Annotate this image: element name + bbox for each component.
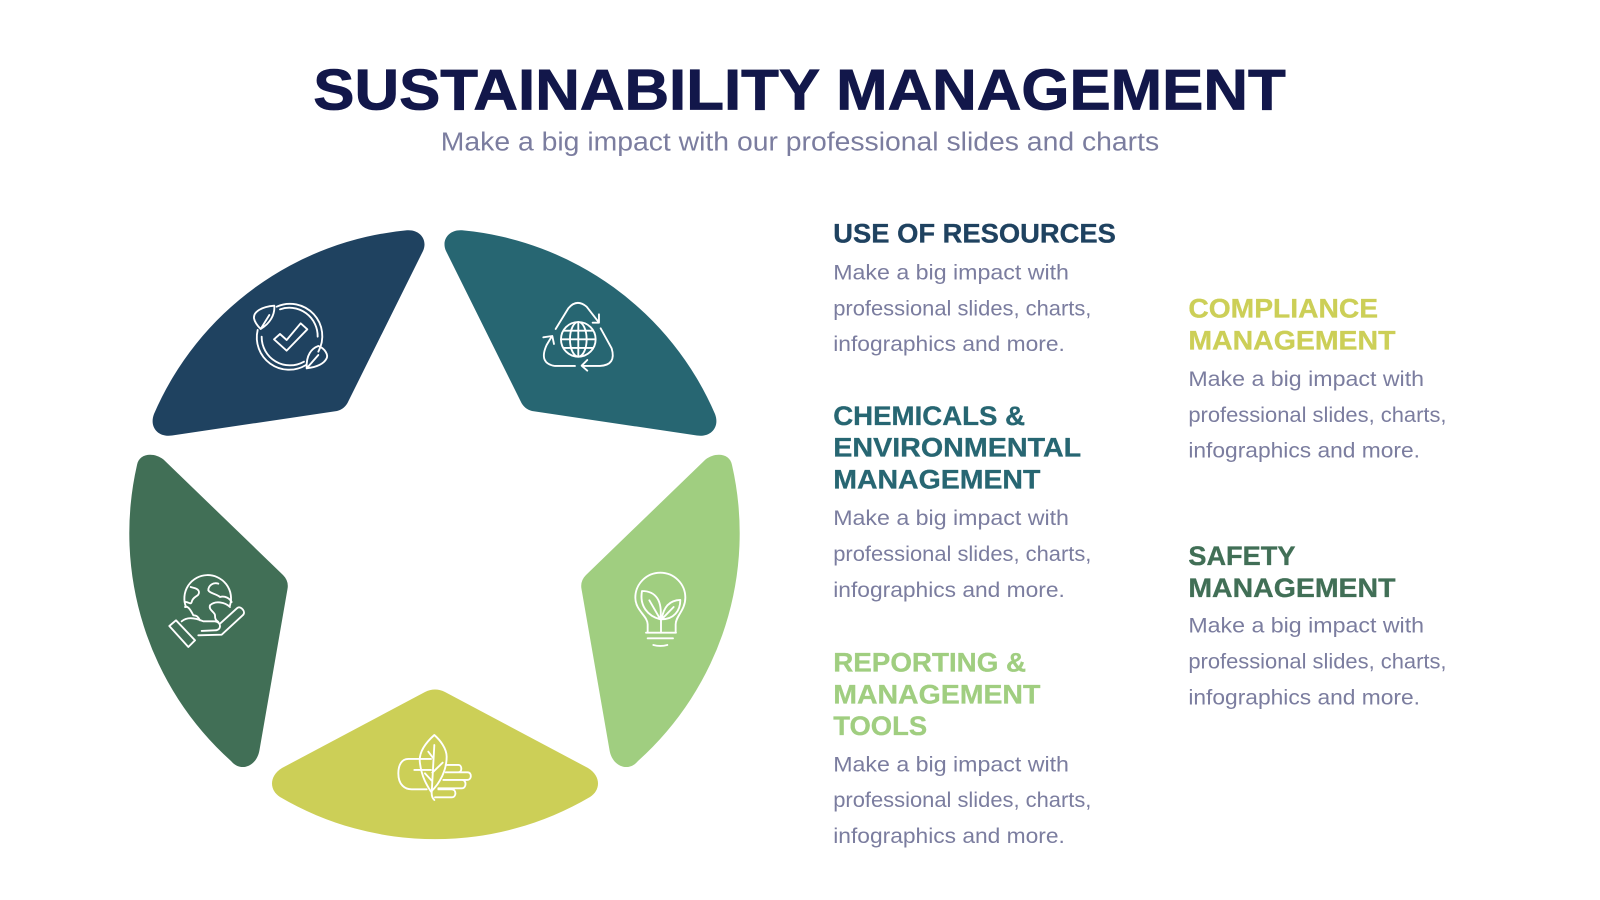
- text block: compliance management: [1188, 293, 1447, 463]
- text block: use of resources: [833, 219, 1116, 356]
- text block: chemicals and environmental management: Make a big impact with: [833, 507, 1069, 530]
- text block: compliance management: infographics and more.: [1188, 440, 1420, 463]
- text block: compliance management: COMPLIANCE: [1188, 293, 1378, 323]
- text block: reporting and management tools: professional slides, charts,: [833, 789, 1091, 812]
- icon: light bulb with leaves: [635, 573, 685, 646]
- text block: safety management: infographics and more.: [1188, 686, 1420, 709]
- text block: safety management: [1188, 541, 1447, 709]
- text block: reporting and management tools: MANAGEMENT: [833, 679, 1040, 709]
- star wheel diagram: [129, 230, 740, 839]
- segment: use of resources: [153, 230, 425, 436]
- text block: reporting and management tools: infographics and more.: [833, 825, 1065, 848]
- text block: chemicals and environmental management: [833, 401, 1091, 602]
- text block: use of resources: USE OF RESOURCES: [833, 219, 1116, 249]
- icon: check mark with leaves: [254, 304, 327, 370]
- text block: reporting and management tools: TOOLS: [833, 711, 927, 741]
- text block: safety management: MANAGEMENT: [1188, 573, 1395, 603]
- icon: hand with leaf: [398, 735, 471, 800]
- text block: chemicals and environmental management: MANAGEMENT: [833, 464, 1040, 494]
- icon: recycling globe: [543, 303, 613, 371]
- segment: chemicals and environmental management: [444, 230, 716, 436]
- text block: chemicals and environmental management: CHEMICALS &: [833, 401, 1025, 431]
- text block: safety management: SAFETY: [1188, 541, 1296, 571]
- segment: safety management: [129, 455, 288, 767]
- text block: reporting and management tools: Make a big impact with: [833, 753, 1069, 776]
- text block: compliance management: MANAGEMENT: [1188, 326, 1395, 356]
- text block: chemicals and environmental management: infographics and more.: [833, 579, 1065, 602]
- text block: compliance management: Make a big impact with: [1188, 368, 1424, 391]
- text block: use of resources: Make a big impact with: [833, 261, 1069, 284]
- subtitle: Make a big impact with our professional slides and charts: [441, 128, 1159, 156]
- segment: reporting and management tools: [581, 455, 740, 767]
- text block: chemicals and environmental management: ENVIRONMENTAL: [833, 433, 1081, 463]
- title: SUSTAINABILITY MANAGEMENT: [313, 58, 1286, 123]
- icon: hand holding globe: [169, 575, 244, 647]
- text block: reporting and management tools: REPORTING &: [833, 648, 1026, 678]
- text block: reporting and management tools: [833, 648, 1091, 848]
- segment: compliance management: [272, 690, 598, 839]
- text block: safety management: Make a big impact with: [1188, 615, 1424, 638]
- text block: compliance management: professional slides, charts,: [1188, 404, 1447, 427]
- text block: use of resources: infographics and more.: [833, 333, 1065, 356]
- text block: safety management: professional slides, charts,: [1188, 650, 1447, 673]
- text block: use of resources: professional slides, charts,: [833, 297, 1091, 320]
- text block: chemicals and environmental management: professional slides, charts,: [833, 543, 1091, 566]
